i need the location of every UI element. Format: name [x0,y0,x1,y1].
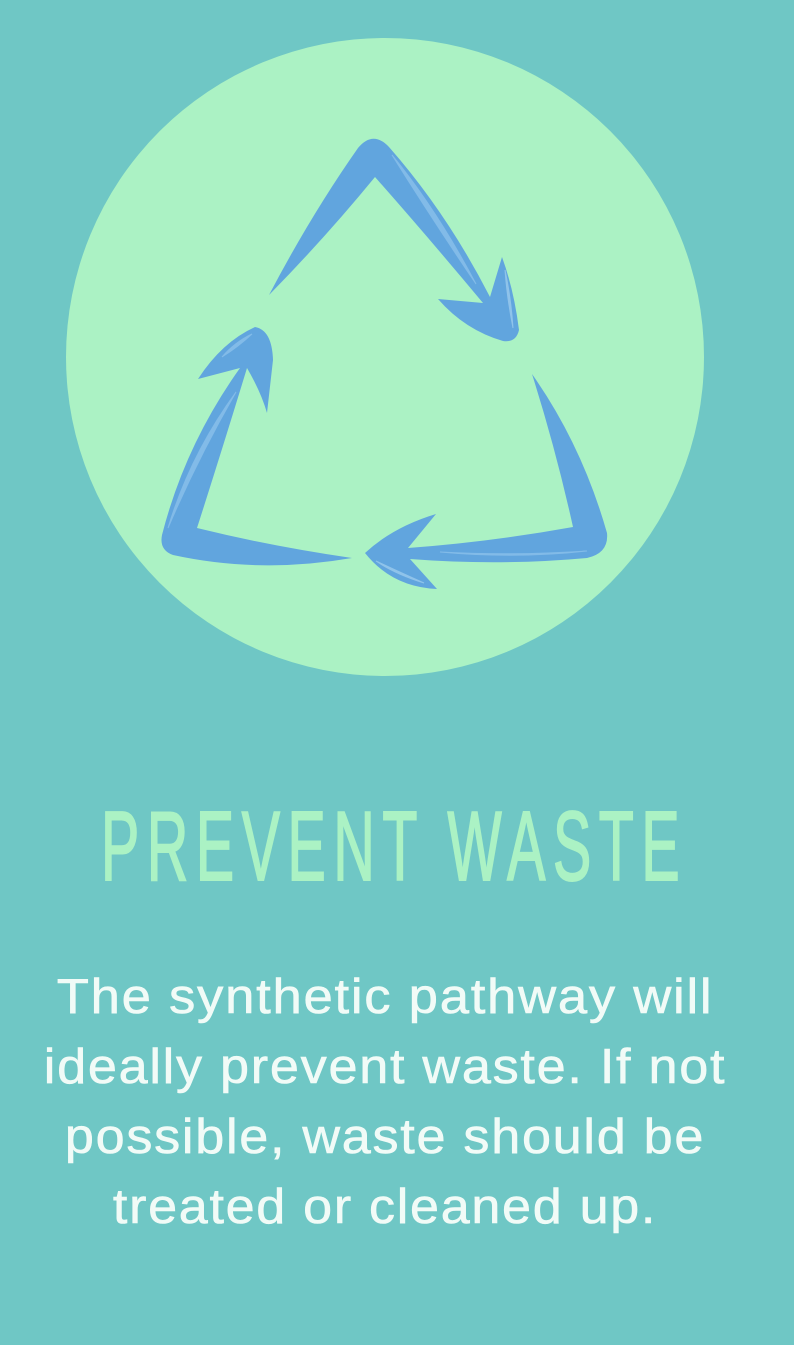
arrow: right [365,374,607,589]
circle background [66,38,704,676]
text block: ideally prevent waste. If not [44,1040,726,1094]
arrow: left [161,327,352,565]
text block: treated or cleaned up. [113,1180,657,1234]
heading: PREVENT WASTE [101,791,687,901]
arrow: top [269,139,519,341]
text block [44,970,726,1234]
icon: recycling arrows in circle [66,38,704,676]
text block: possible, waste should be [65,1110,705,1164]
text block: The synthetic pathway will [57,970,713,1024]
